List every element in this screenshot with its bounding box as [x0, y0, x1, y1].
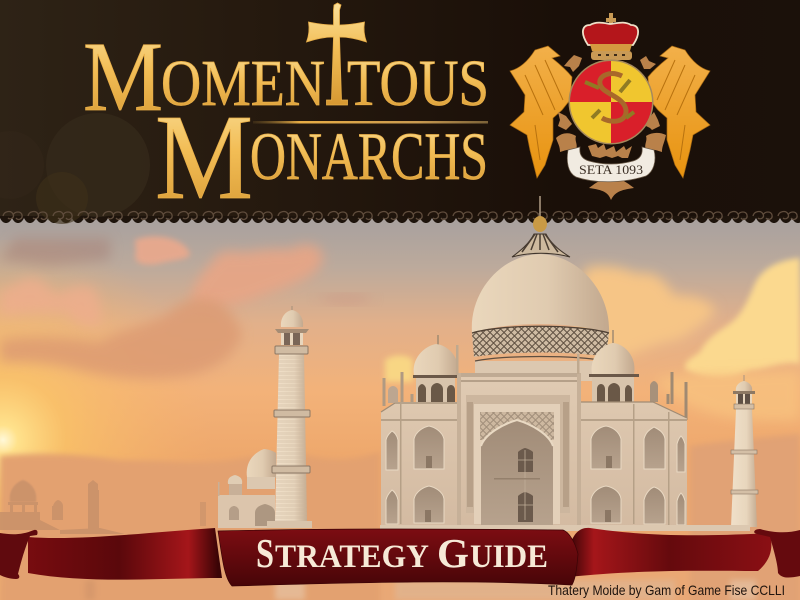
- sky background: [0, 215, 800, 600]
- title: M: [83, 21, 163, 132]
- Taj Mahal main building: [380, 254, 750, 531]
- left wing: [510, 46, 572, 178]
- title: [83, 3, 489, 225]
- feather lines: [525, 60, 695, 160]
- banner heading: S: [256, 530, 274, 576]
- crown: [583, 13, 638, 60]
- strategy guide banner: [0, 528, 800, 586]
- coat of arms crest: [510, 13, 710, 200]
- right chhatri: [589, 330, 686, 420]
- left ribbon tail: [28, 528, 222, 580]
- motto ribbon: [567, 147, 655, 182]
- side arches: [386, 426, 685, 525]
- title: TOUS: [347, 47, 489, 120]
- scrollwork ornaments: [556, 55, 666, 200]
- dome finial and canopy: [512, 196, 570, 257]
- right minaret: [731, 375, 758, 527]
- cross ornament: [306, 3, 366, 105]
- small side tomb: [218, 449, 276, 528]
- left minaret: [267, 306, 312, 528]
- distant hills: [0, 434, 800, 600]
- central portal arch: [480, 412, 554, 526]
- center panel: [218, 529, 578, 586]
- water reflection: [85, 580, 756, 600]
- title underline rule: [253, 121, 488, 124]
- right wing: [648, 46, 710, 178]
- right ribbon end fold: [754, 529, 800, 578]
- title: OMEN: [161, 47, 325, 120]
- shield circle: [570, 60, 652, 144]
- motto ribbon: SETA 1093: [579, 163, 643, 177]
- title: M: [155, 90, 253, 225]
- right ribbon tail: [568, 528, 771, 577]
- walls: [381, 373, 687, 530]
- banner heading: G: [437, 530, 469, 576]
- main dome: [472, 254, 609, 381]
- banner heading: UIDE: [470, 539, 548, 575]
- left ribbon end fold: [0, 530, 38, 579]
- clouds: right cream clouds: [385, 258, 800, 420]
- banner heading: TRATEGY: [275, 539, 429, 575]
- left chhatri: [384, 335, 458, 406]
- banner heading: [256, 530, 548, 576]
- title: ONARCHS: [250, 118, 488, 194]
- header band: [0, 0, 800, 224]
- distant palace silhouette: [0, 480, 206, 534]
- clouds: left pink clouds: [0, 236, 375, 378]
